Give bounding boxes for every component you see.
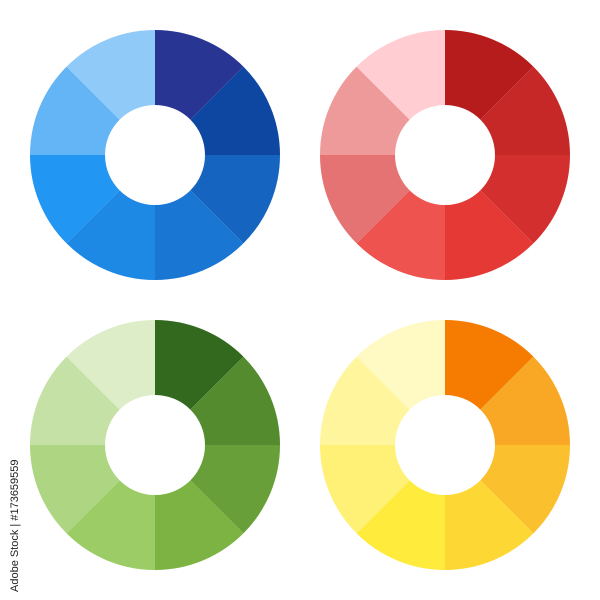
donut: yellow (320, 320, 570, 570)
watermark text: Adobe Stock | #173659559 (9, 459, 21, 592)
donut: green (30, 320, 280, 570)
donut: red (320, 30, 570, 280)
donut: blue (30, 30, 280, 280)
